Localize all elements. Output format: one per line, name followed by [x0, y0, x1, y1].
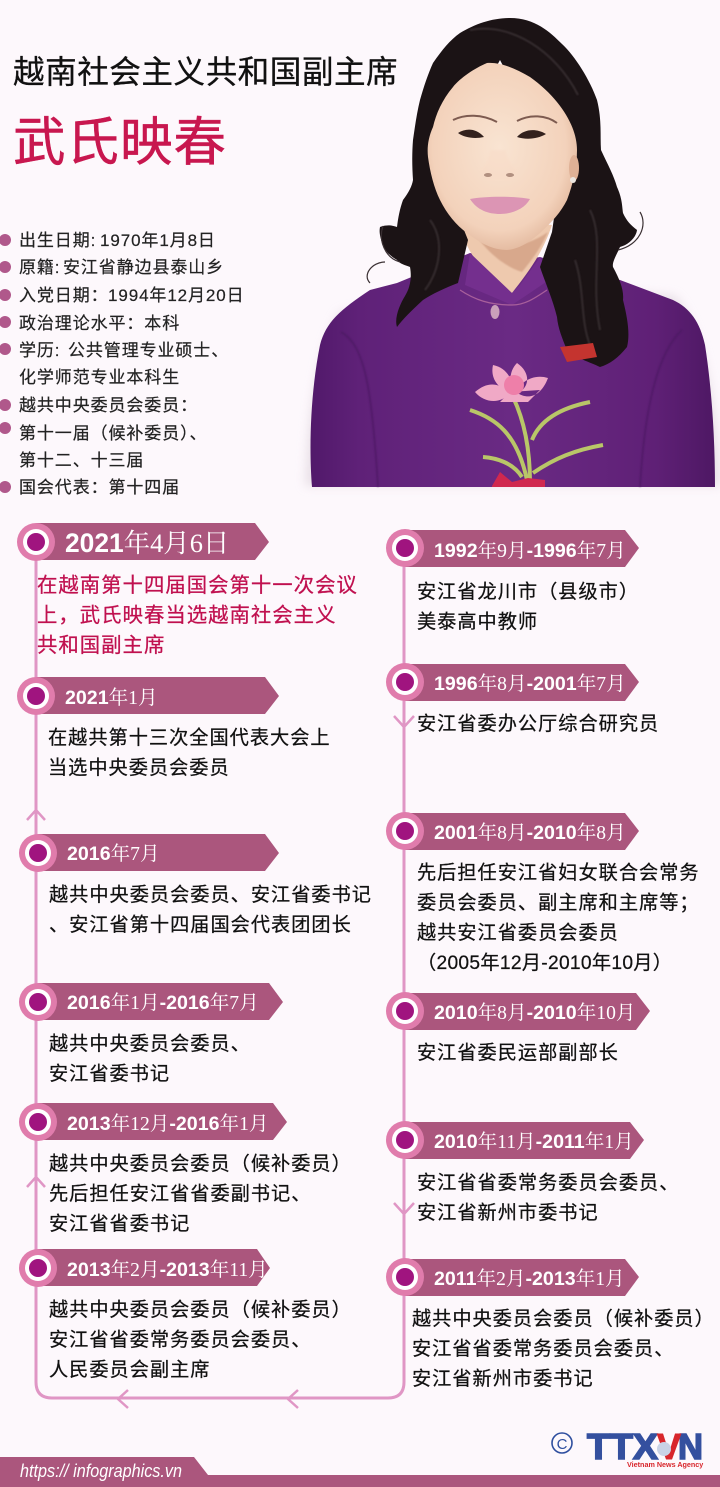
entry: 2016年7月: 2016年7月 [67, 843, 160, 865]
footer band: https:// infographics.vn [20, 1461, 182, 1481]
personal details list: 越共中央委员会委员： [19, 396, 198, 415]
personal details list: 原籍: [19, 258, 60, 277]
entry: 2010年8月-2010年10月 [386, 992, 650, 1064]
eyes [458, 130, 546, 139]
entry: 2021年4月6日: 在越南第十四届国会第十一次会议 [37, 574, 358, 597]
collar [465, 253, 552, 305]
entry: 2021年4月6日: 共和国副主席 [37, 634, 165, 657]
entry: 2021年1月: 2021年1月 [65, 687, 158, 709]
personal details list: 出生日期: [19, 231, 96, 250]
logo: TTXVN [587, 1426, 703, 1469]
entry: 1992年9月-1996年7月 [386, 529, 639, 633]
entry: 2021年1月: 当选中央委员会委员 [48, 757, 230, 779]
personal details list: 入党日期： [19, 286, 108, 305]
entry: 1992年9月-1996年7月: 安江省龙川市（县级市） [417, 581, 639, 603]
entry: 2001年8月-2010年8月 [386, 812, 700, 974]
neck [458, 215, 552, 293]
entry: 2011年2月-2013年1月: 安江省新州市委书记 [412, 1368, 594, 1390]
name: 武氏映春 [13, 113, 227, 172]
entry: 1992年9月-1996年7月: 美泰高中教师 [417, 611, 538, 633]
personal details list: 化学师范专业本科生 [19, 368, 180, 387]
entry: 1996年8月-2001年7月 [386, 663, 659, 735]
entry: 1992年9月-1996年7月: 1992年9月-1996年7月 [434, 540, 626, 562]
entry: 2016年7月: 、安江省第十四届国会代表团团长 [49, 914, 352, 936]
personal details list: 1994年12月20日 [108, 286, 245, 305]
entry: 2016年1月-2016年7月: 越共中央委员会委员、 [49, 1033, 251, 1055]
logo: TTXVN: V [657, 1426, 681, 1467]
entry: 2010年11月-2011年1月: 2010年11月-2011年1月 [434, 1131, 634, 1153]
entry: 2010年8月-2010年10月: 2010年8月-2010年10月 [434, 1002, 635, 1024]
entry: 2011年2月-2013年1月: 越共中央委员会委员（候补委员） [412, 1308, 715, 1330]
entry: 2013年12月-2016年1月: 先后担任安江省省委副书记、 [49, 1183, 311, 1205]
lips [470, 197, 530, 214]
logo: TTXVN: TTX [587, 1426, 658, 1467]
entry: 2001年8月-2010年8月: 2001年8月-2010年8月 [434, 822, 626, 844]
personal details list: 1970年1月8日 [100, 231, 216, 250]
personal details list: 政治理论水平：本科 [19, 314, 180, 333]
entry: 1996年8月-2001年7月: 安江省委办公厅综合研究员 [417, 713, 659, 735]
entry: 2016年1月-2016年7月: 安江省委书记 [49, 1063, 170, 1085]
entry: 2013年12月-2016年1月: 2013年12月-2016年1月 [67, 1113, 268, 1135]
entry: 2013年2月-2013年11月: 2013年2月-2013年11月 [67, 1259, 268, 1281]
entry: 2021年4月6日: 2021年4月6日 [65, 528, 229, 558]
copyright symbol: C [557, 1436, 568, 1453]
entry: 2021年4月6日 [17, 523, 358, 657]
portrait photo [305, 18, 720, 487]
personal details list: 公共管理专业硕士、 [68, 341, 229, 360]
entry: 2001年8月-2010年8月: （2005年12月-2010年10月） [417, 952, 672, 974]
entry: 2011年2月-2013年1月: 2011年2月-2013年1月 [434, 1268, 625, 1290]
logo: TTXVN: N [678, 1426, 703, 1467]
entry: 2013年12月-2016年1月: 安江省省委书记 [49, 1213, 190, 1235]
entry: 2010年8月-2010年10月: 安江省委民运部副部长 [417, 1042, 619, 1064]
entry: 1996年8月-2001年7月: 1996年8月-2001年7月 [434, 673, 626, 695]
entry: 2010年11月-2011年1月: 安江省新州市委书记 [417, 1202, 599, 1224]
entry: 2013年2月-2013年11月: 安江省省委常务委员会委员、 [49, 1329, 311, 1351]
entry: 2021年1月: 在越共第十三次全国代表大会上 [48, 727, 331, 749]
entry: 2016年7月: 越共中央委员会委员、安江省委书记 [49, 884, 372, 906]
nose [480, 150, 518, 180]
logo: TTXVN: Vietnam News Agency [627, 1460, 703, 1469]
personal details list: 第十二、十三届 [19, 451, 144, 470]
entry: 2010年11月-2011年1月 [386, 1121, 679, 1224]
entry: 2013年2月-2013年11月 [19, 1249, 352, 1381]
entry: 2016年1月-2016年7月 [19, 983, 283, 1085]
flag badge [560, 343, 597, 362]
personal details list: 国会代表：第十四届 [19, 478, 180, 497]
entry: 2001年8月-2010年8月: 越共安江省委员会委员 [417, 922, 619, 944]
footer band [0, 1457, 720, 1487]
entry: 2021年4月6日: 上，武氏映春当选越南社会主义 [37, 604, 336, 627]
personal details list: 第十一届（候补委员）、 [19, 424, 207, 443]
entry: 2011年2月-2013年1月: 安江省省委常务委员会委员、 [412, 1338, 674, 1360]
entry: 2021年1月 [17, 677, 331, 779]
necklace and pendant [460, 290, 547, 319]
hair [380, 18, 637, 367]
personal details list: 学历: [19, 341, 60, 360]
dress [311, 253, 715, 487]
title: 越南社会主义共和国副主席 [13, 54, 398, 90]
entry: 2010年11月-2011年1月: 安江省省委常务委员会委员、 [417, 1172, 679, 1194]
entry: 2001年8月-2010年8月: 先后担任安江省妇女联合会常务 [417, 862, 700, 884]
timeline connector line with arrows [27, 542, 414, 1408]
personal details list [0, 231, 245, 497]
personal details list: 安江省静边县泰山乡 [63, 258, 224, 277]
ear and earring [569, 155, 579, 183]
eyebrows [453, 116, 557, 123]
lotus flower embroidery [470, 363, 603, 487]
entry: 2013年2月-2013年11月: 人民委员会副主席 [49, 1359, 210, 1381]
entry: 2013年12月-2016年1月 [19, 1103, 352, 1235]
entry: 2013年2月-2013年11月: 越共中央委员会委员（候补委员） [49, 1299, 352, 1321]
entry: 2016年1月-2016年7月: 2016年1月-2016年7月 [67, 992, 259, 1014]
entry: 2016年7月 [19, 834, 372, 936]
entry: 2011年2月-2013年1月 [386, 1258, 715, 1390]
entry: 2001年8月-2010年8月: 委员会委员、副主席和主席等； [417, 892, 700, 914]
copyright symbol [552, 1433, 572, 1453]
entry: 2013年12月-2016年1月: 越共中央委员会委员（候补委员） [49, 1153, 352, 1175]
face [428, 63, 577, 250]
